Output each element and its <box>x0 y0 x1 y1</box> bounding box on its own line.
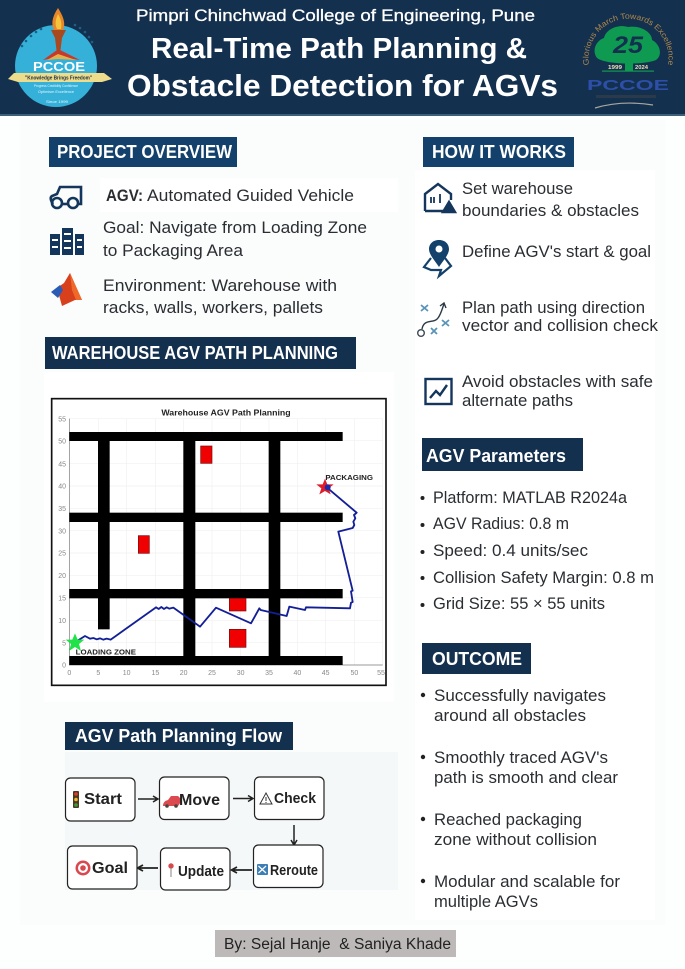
arrow: reroute to update <box>232 867 252 873</box>
logo: PCCOE torch emblem: Progress Credibility Confidence <box>34 83 79 88</box>
outcome list: Modular and scalable for <box>434 873 621 891</box>
chart: warehouse path plot <box>52 399 386 685</box>
panel: AGV path planning flow <box>65 722 398 890</box>
heading: warehouse AGV path planning <box>45 337 356 369</box>
flow step: reroute <box>254 845 323 888</box>
y axis labels: 15 <box>58 595 66 602</box>
icon: line chart <box>426 379 452 404</box>
text: step 3: vector and collision check <box>462 317 659 335</box>
heading: warehouse AGV path planning: WAREHOUSE AGV PATH PLANNING <box>52 343 338 363</box>
text: step 1: Set warehouse <box>462 180 573 198</box>
flow step: move <box>160 777 229 820</box>
flow step: start: Start <box>84 791 122 808</box>
text: goal: to Packaging Area <box>103 242 244 260</box>
label: packaging: PACKAGING <box>325 473 373 482</box>
text: goal <box>103 219 367 260</box>
title: Real-Time Path Planning & <box>151 33 527 65</box>
college name: Pimpri Chinchwad College of Engineering, Pune <box>136 7 535 25</box>
y axis labels: 0 <box>62 663 66 670</box>
x axis labels: 50 <box>350 670 358 677</box>
logo: 25 years emblem: 25 <box>612 32 644 59</box>
outcome list: multiple AGVs <box>434 893 538 911</box>
x axis labels: 15 <box>151 670 159 677</box>
logo: 25 years emblem: 1999 <box>608 65 622 71</box>
logo: PCCOE torch emblem: "Knowledge Brings Freedom" <box>25 76 93 82</box>
icon: planned path <box>418 303 449 336</box>
chart grid <box>69 419 383 665</box>
arrow: update to goal <box>138 865 158 871</box>
parameter list <box>420 489 654 613</box>
flow step: update <box>160 848 230 890</box>
outcome list: Reached packaging <box>434 811 582 829</box>
x axis labels: 10 <box>123 670 131 677</box>
outcome list: Successfully navigates <box>434 687 606 705</box>
text: step 1 <box>462 180 639 220</box>
y axis labels: 40 <box>58 484 66 491</box>
flow step: goal <box>68 846 137 889</box>
heading: outcome <box>422 643 531 674</box>
heading: how it works <box>423 137 574 167</box>
footer: authors <box>215 930 456 957</box>
chart title: Warehouse AGV Path Planning <box>161 408 291 418</box>
outcome list <box>421 687 621 911</box>
arrow: check to reroute <box>291 825 297 845</box>
text: step 4 <box>462 373 653 410</box>
header banner <box>0 0 685 116</box>
text: goal: Goal: Navigate from Loading Zone <box>103 219 367 237</box>
text: step 2: Define AGV's start & goal <box>462 243 651 261</box>
x axis labels: 40 <box>293 670 301 677</box>
flow step: check <box>254 777 324 820</box>
x axis labels: 30 <box>237 670 245 677</box>
panel: project overview <box>49 137 367 317</box>
outcome list: path is smooth and clear <box>434 769 619 787</box>
text: step 3: Plan path using direction <box>462 299 645 317</box>
heading: project overview: PROJECT OVERVIEW <box>57 142 232 162</box>
heading: AGV parameters <box>422 438 583 471</box>
heading: outcome: OUTCOME <box>432 649 522 669</box>
flow step: update: Update <box>178 864 224 880</box>
logo: 25 years emblem <box>582 13 673 109</box>
text: AGV definition: Automated Guided Vehicle <box>147 187 354 205</box>
y axis labels: 55 <box>58 416 66 423</box>
obstacles <box>138 446 246 647</box>
heading: AGV parameters: AGV Parameters <box>426 446 566 466</box>
logo: PCCOE torch emblem: Since 1999 <box>46 99 69 104</box>
x axis labels <box>67 670 385 677</box>
flow step: check: Check <box>274 791 317 807</box>
y axis labels: 30 <box>58 528 66 535</box>
parameter list: Collision Safety Margin: 0.8 m <box>433 569 654 587</box>
flow step: goal: Goal <box>92 860 128 877</box>
logo: 25 years emblem: PCCOE <box>587 77 669 94</box>
logo: 25 years emblem: 2024 <box>635 65 649 71</box>
y axis labels <box>58 416 66 670</box>
icon: buildings <box>50 228 84 255</box>
flow step: move: Move <box>179 792 220 809</box>
text: environment: racks, walls, workers, pallets <box>103 299 323 317</box>
text: step 1: boundaries & obstacles <box>462 202 639 220</box>
logo: 25 years emblem: Glorious March Towards Excellence <box>582 13 673 65</box>
panel: how it works <box>418 137 659 410</box>
outcome list: around all obstacles <box>434 707 586 725</box>
y axis labels: 35 <box>58 506 66 513</box>
flow step: start <box>66 778 135 821</box>
x axis labels: 20 <box>180 670 188 677</box>
outcome list: zone without collision <box>434 831 597 849</box>
y axis labels: 25 <box>58 551 66 558</box>
title <box>127 33 558 103</box>
parameter list: Grid Size: 55 × 55 units <box>433 595 605 613</box>
heading: flow: AGV Path Planning Flow <box>75 726 283 746</box>
y axis labels: 20 <box>58 573 66 580</box>
x axis labels: 5 <box>96 670 100 677</box>
panel: outcome <box>421 643 621 911</box>
goal marker <box>316 479 334 494</box>
text: environment <box>103 277 337 317</box>
x axis labels: 55 <box>377 670 385 677</box>
parameter list: Platform: MATLAB R2024a <box>433 489 628 507</box>
heading: flow <box>65 722 293 750</box>
logo: PCCOE torch emblem <box>8 8 112 107</box>
icon: MATLAB logo <box>51 273 82 306</box>
text: step 4: Avoid obstacles with safe <box>462 373 653 391</box>
label: loading zone: LOADING ZONE <box>76 648 136 657</box>
arrow: start to move <box>138 796 158 802</box>
y axis labels: 45 <box>58 461 66 468</box>
text: environment: Environment: Warehouse with <box>103 277 337 295</box>
icon: vehicle <box>51 187 81 208</box>
heading: project overview <box>49 137 237 167</box>
start marker <box>66 633 84 651</box>
y axis labels: 5 <box>62 640 66 647</box>
arrow: move to check <box>233 796 253 802</box>
logo: PCCOE torch emblem: Optimism Excellence <box>38 89 75 94</box>
x axis labels: 35 <box>265 670 273 677</box>
AGV path <box>75 487 357 642</box>
text: step 3 <box>462 299 659 335</box>
panel: AGV parameters <box>420 438 654 613</box>
text: step 4: alternate paths <box>462 392 573 410</box>
y axis labels: 50 <box>58 438 66 445</box>
parameter list: AGV Radius: 0.8 m <box>433 515 569 533</box>
x axis labels: 25 <box>208 670 216 677</box>
flow step: reroute: Reroute <box>270 863 318 879</box>
title: Obstacle Detection for AGVs <box>127 68 558 103</box>
text: AGV definition: AGV: <box>106 187 143 205</box>
heading: how it works: HOW IT WORKS <box>432 142 566 162</box>
icon: warehouse <box>425 184 455 212</box>
icon: map pin <box>424 240 451 276</box>
walls <box>69 432 343 665</box>
x axis labels: 45 <box>322 670 330 677</box>
parameter list: Speed: 0.4 units/sec <box>433 542 588 560</box>
x axis labels: 0 <box>67 670 71 677</box>
logo: PCCOE torch emblem: PCCOE <box>33 59 85 74</box>
footer: authors: By: Sejal Hanje & Saniya Khade <box>224 936 451 953</box>
y axis labels: 10 <box>58 618 66 625</box>
outcome list: Smoothly traced AGV's <box>434 749 608 767</box>
